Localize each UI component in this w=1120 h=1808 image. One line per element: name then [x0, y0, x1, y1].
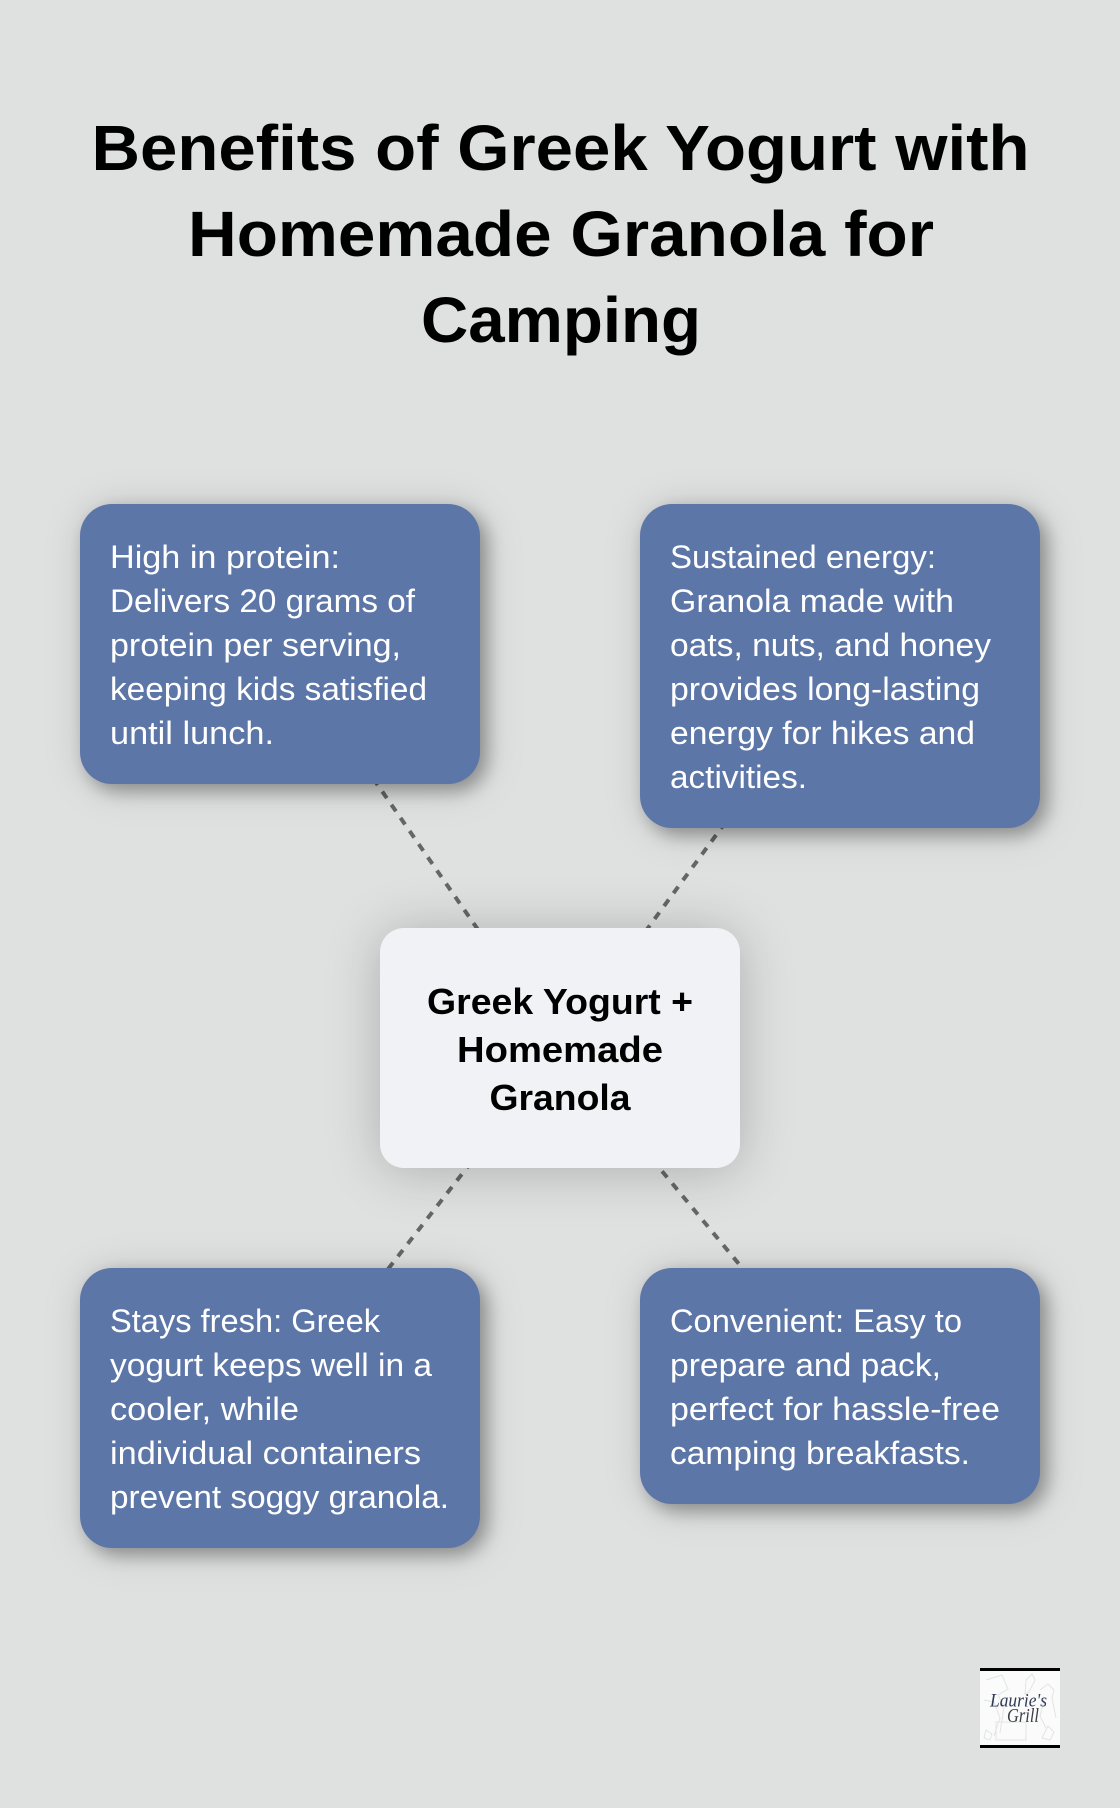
panel: stays fresh: [80, 1268, 480, 1548]
panel: convenient: Convenient: Easy to: [670, 1303, 962, 1339]
panel: sustained energy: activities.: [670, 759, 807, 795]
panel: sustained energy: Sustained energy:: [670, 539, 936, 575]
title: Camping: [421, 284, 701, 356]
panel: convenient: [640, 1268, 1040, 1504]
panel: high in protein: protein per serving,: [110, 627, 401, 663]
panel: sustained energy: oats, nuts, and honey: [670, 627, 991, 663]
panel: convenient: camping breakfasts.: [670, 1435, 970, 1471]
panel: stays fresh: prevent soggy granola.: [110, 1479, 449, 1515]
panel: sustained energy: provides long-lasting: [670, 671, 980, 707]
panel: high in protein: until lunch.: [110, 715, 274, 751]
panel: sustained energy: [640, 504, 1040, 828]
panel: sustained energy: energy for hikes and: [670, 715, 975, 751]
panel: stays fresh: yogurt keeps well in a: [110, 1347, 432, 1383]
title: Benefits of Greek Yogurt with: [92, 112, 1030, 184]
logo: Laurie's Grill: [980, 1668, 1060, 1748]
title: Homemade Granola for: [188, 198, 934, 270]
panel: central hub: Homemade: [457, 1029, 663, 1070]
panel: high in protein: Delivers 20 grams of: [110, 583, 415, 619]
title: [92, 112, 1030, 356]
panel: central hub: Greek Yogurt +: [427, 981, 693, 1022]
panel: central hub: [380, 928, 740, 1168]
panel: high in protein: [80, 504, 480, 784]
panel: high in protein: High in protein:: [110, 539, 340, 575]
panel: stays fresh: individual containers: [110, 1435, 421, 1471]
panel: central hub: Granola: [490, 1077, 632, 1118]
panel: convenient: prepare and pack,: [670, 1347, 941, 1383]
logo: Laurie's Grill: Grill: [1007, 1705, 1039, 1727]
panel: high in protein: keeping kids satisfied: [110, 671, 427, 707]
panel: stays fresh: cooler, while: [110, 1391, 299, 1427]
panel: stays fresh: Stays fresh: Greek: [110, 1303, 381, 1339]
logo: Laurie's Grill: Laurie's: [989, 1690, 1047, 1712]
connector lines: [280, 644, 840, 1408]
panel: convenient: perfect for hassle-free: [670, 1391, 1000, 1427]
panel: sustained energy: Granola made with: [670, 583, 954, 619]
